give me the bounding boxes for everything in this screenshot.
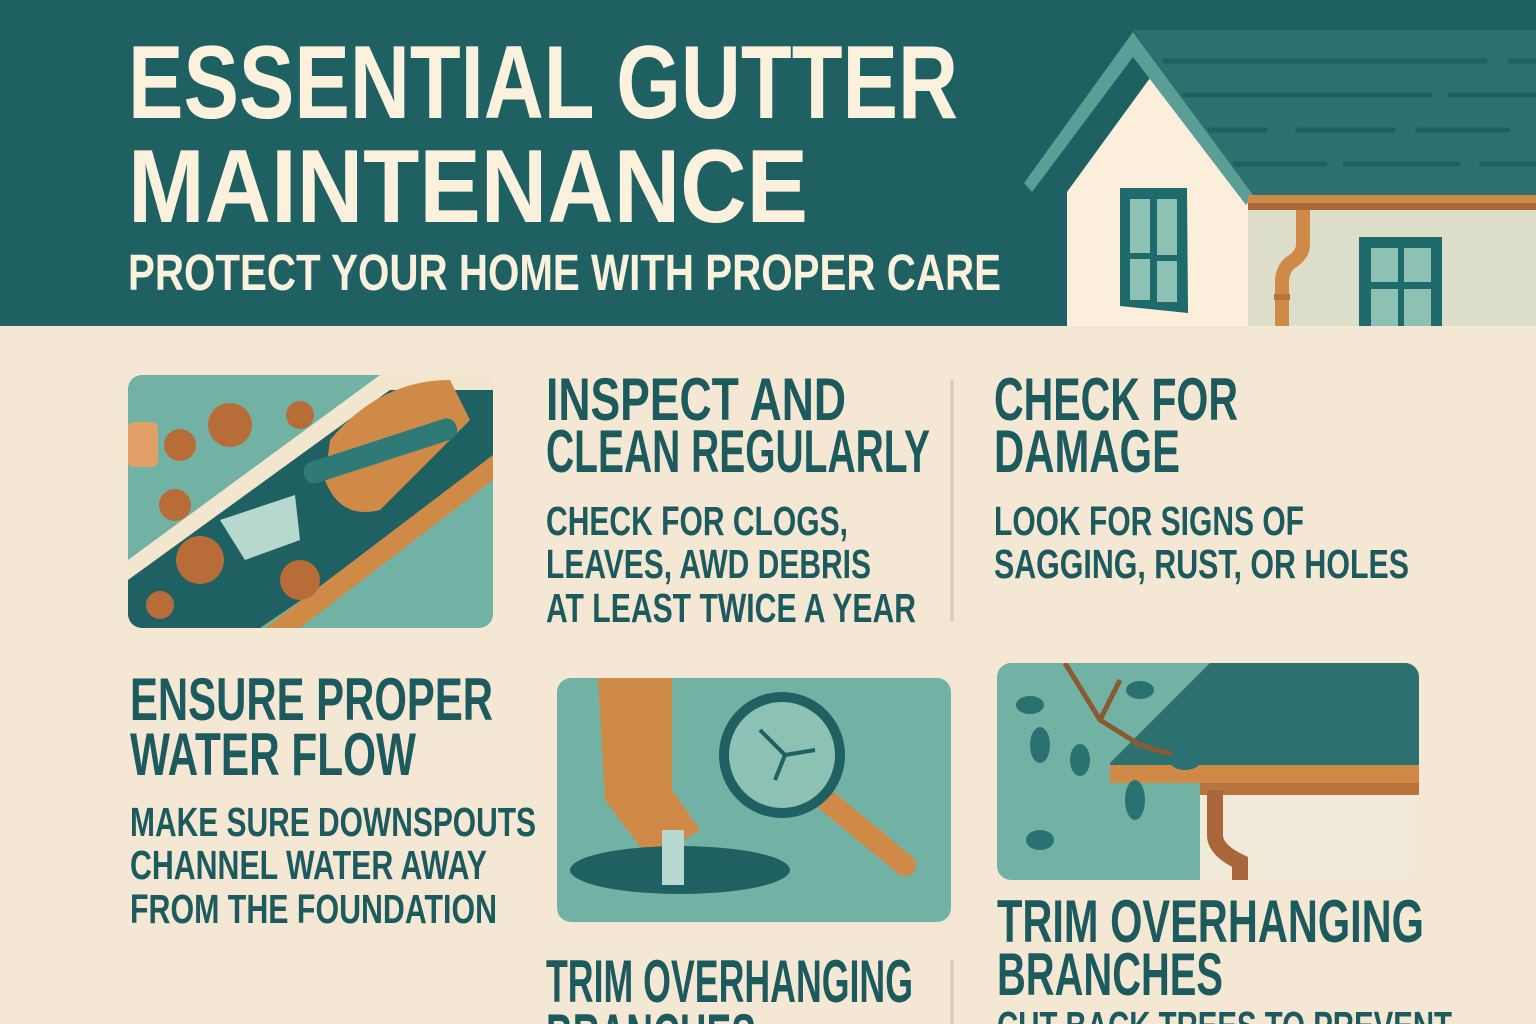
card image: branches over gutter [997,663,1419,880]
heading: trim overhanging branches (right) [997,888,1452,1024]
title: ESSENTIAL GUTTER [128,25,958,141]
heading: water flow [130,666,493,788]
card image: gutter cleaning [128,375,493,628]
heading: inspect and clean [546,366,930,485]
text: inspect body: CHECK FOR CLOGS, [546,498,848,544]
heading: inspect and clean: CLEAN REGULARLY [546,418,930,485]
house illustration [1024,30,1536,326]
card image: downspout and magnifier [557,678,951,922]
text: inspect body [546,498,916,631]
heading: water flow: ENSURE PROPER [130,666,493,733]
text: damage body: LOOK FOR SIGNS OF [994,498,1304,544]
heading: trim overhanging (bottom center): TRIM OVERHANGING [546,948,913,1015]
heading: water flow: WATER FLOW [130,721,416,788]
subtitle: PROTECT YOUR HOME WITH PROPER CARE [128,244,1001,301]
text: water flow body [130,799,536,932]
heading: trim overhanging branches (right): BRANCHES [997,941,1223,1008]
header band [0,0,1536,326]
text: water flow body: MAKE SURE DOWNSPOUTS [130,799,536,845]
text: inspect body: AT LEAST TWICE A YEAR [546,585,916,631]
text: water flow body: CHANNEL WATER AWAY [130,842,487,888]
heading: inspect and clean: INSPECT AND [546,366,846,433]
heading: trim overhanging (bottom center) [546,948,913,1024]
title [128,25,958,245]
title: MAINTENANCE [128,129,808,245]
text: damage body [994,498,1409,587]
heading: check for damage: CHECK FOR [994,366,1238,433]
text: water flow body: FROM THE FOUNDATION [130,886,497,932]
heading: check for damage [994,366,1238,485]
text: inspect body: LEAVES, AWD DEBRIS [546,541,871,587]
heading: check for damage: DAMAGE [994,418,1180,485]
